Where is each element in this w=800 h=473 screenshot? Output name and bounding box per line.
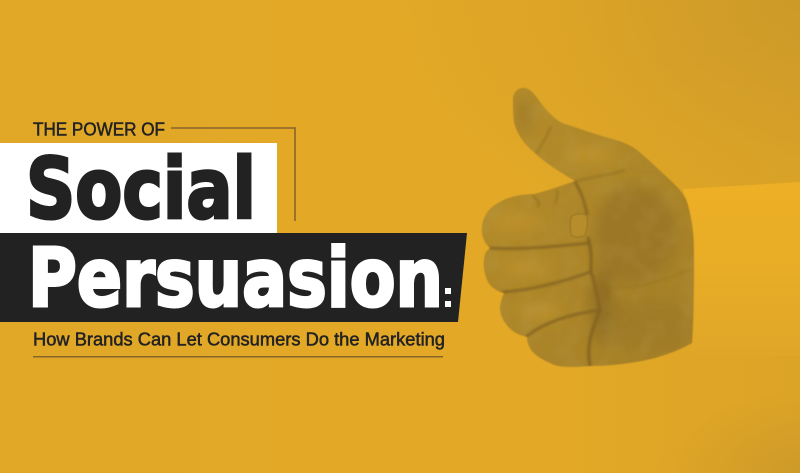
thumbnail of folded finger <box>570 214 587 237</box>
hand shading <box>500 100 674 344</box>
panel: white title band <box>0 140 277 238</box>
heading: The Power of: THE POWER OF <box>33 120 165 140</box>
subtitle underline <box>33 356 443 358</box>
subtitle: How Brands Can Let Consumers Do the Marketing <box>33 328 445 350</box>
shirt sleeve <box>683 182 800 357</box>
finger creases <box>489 127 625 366</box>
connector line: top-right bracket <box>171 128 295 221</box>
panel: dark title band <box>0 232 467 326</box>
skin mottling <box>489 111 694 335</box>
icon: thumbs-up hand <box>480 85 696 370</box>
title word: Social: Social <box>26 140 256 238</box>
title colon <box>445 288 451 307</box>
title word: Persuasion: Persuasion <box>28 232 443 326</box>
